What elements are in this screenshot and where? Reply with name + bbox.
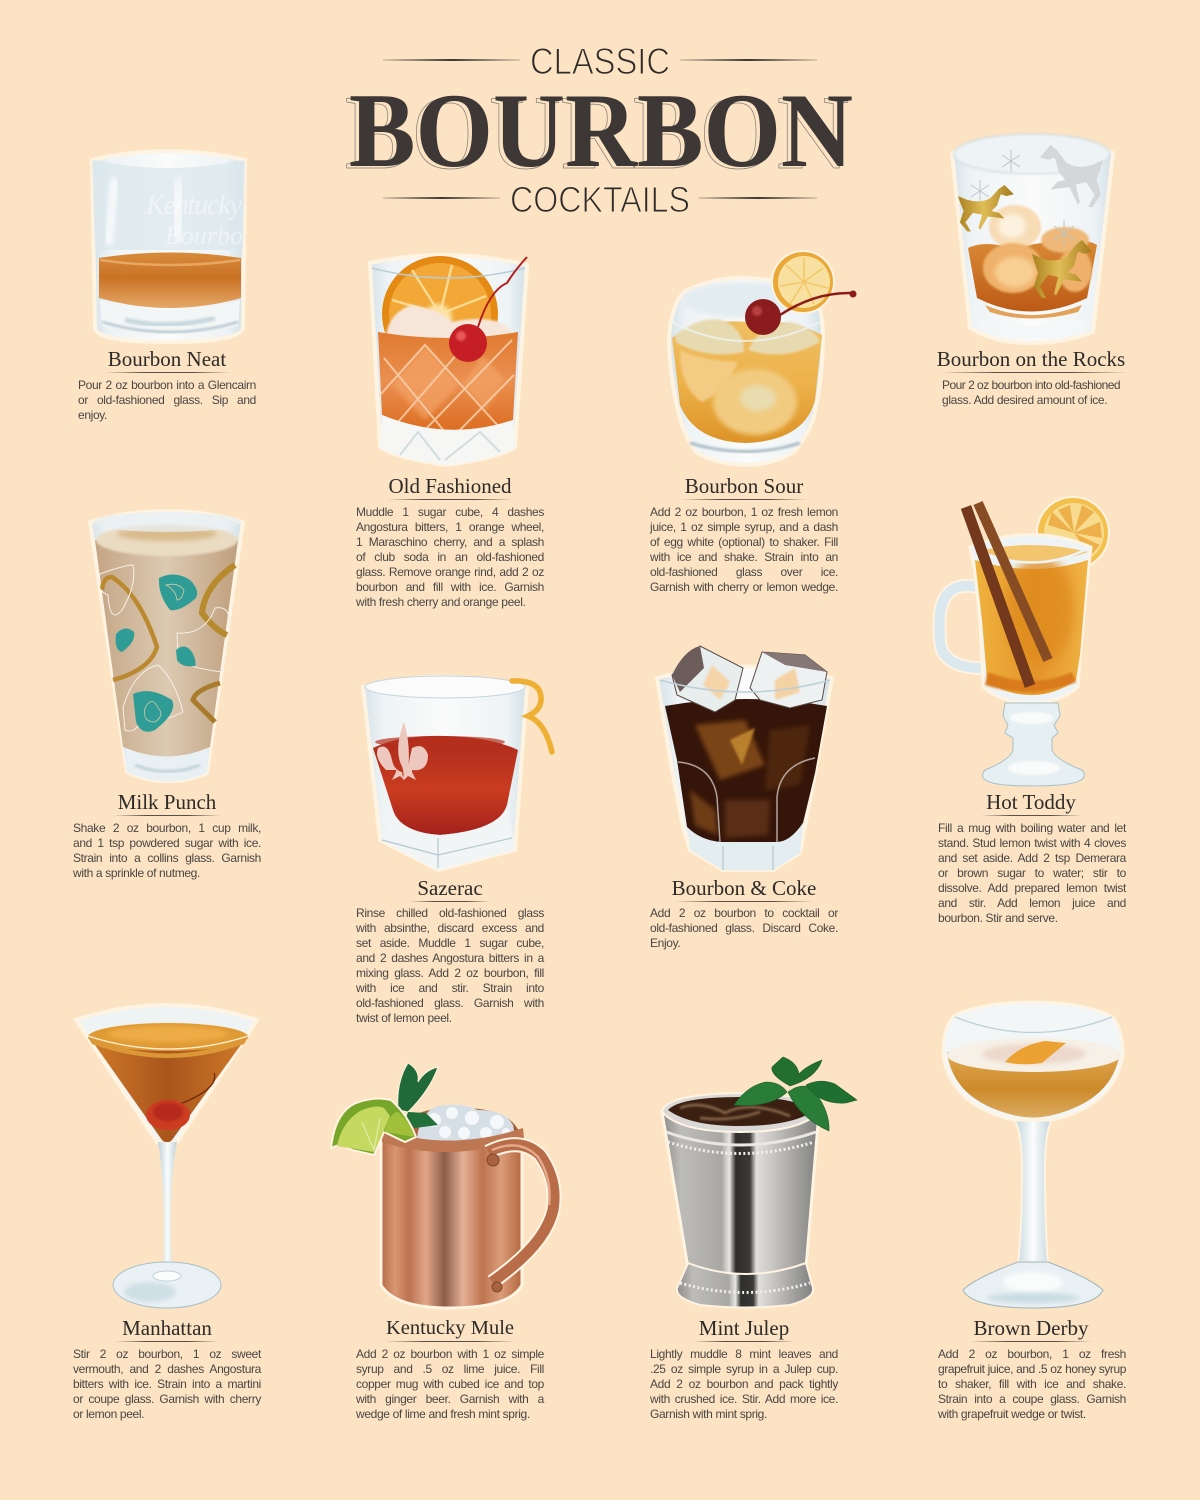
panel: Bourbon Sour bbox=[650, 250, 856, 594]
recipe: Brown Derby bbox=[938, 1346, 1126, 1420]
recipe: Hot Toddy bbox=[938, 820, 1126, 924]
recipe: Bourbon Sour: with ice and shake. Strain into an bbox=[650, 550, 838, 564]
recipe: Manhattan: or coupe glass. Garnish with cherry bbox=[73, 1392, 261, 1406]
recipe: Hot Toddy: Fill a mug with boiling water and let bbox=[938, 820, 1126, 834]
heading: Bourbon & Coke: Bourbon & Coke bbox=[672, 876, 816, 900]
recipe: Hot Toddy: and set aside. Add 2 tsp Demerara bbox=[938, 850, 1126, 864]
panel: Bourbon Neat bbox=[78, 149, 256, 422]
recipe: Bourbon Sour: juice, 1 oz simple syrup, and a dash bbox=[650, 520, 838, 534]
illustration: Bourbon Sour glass bbox=[667, 250, 856, 467]
recipe: Bourbon & Coke: Enjoy. bbox=[650, 936, 680, 950]
recipe: Bourbon & Coke: Add 2 oz bourbon to cocktail or bbox=[650, 906, 838, 920]
recipe: Bourbon Sour: Add 2 oz bourbon, 1 oz fresh lemon bbox=[650, 504, 838, 518]
recipe: Hot Toddy: dissolve. Add prepared lemon twist bbox=[938, 880, 1126, 894]
recipe: Sazerac: old-fashioned glass. Garnish with bbox=[356, 996, 544, 1010]
icon: cinnamon sticks bbox=[966, 503, 1048, 686]
recipe: Bourbon on the Rocks bbox=[942, 378, 1120, 406]
icon: crushed ice bbox=[417, 1105, 515, 1143]
recipe: Brown Derby: Add 2 oz bourbon, 1 oz fresh bbox=[938, 1346, 1126, 1360]
illustration: Bourbon Neat glass: Kentucky bbox=[145, 190, 243, 221]
illustration: Old Fashioned glass bbox=[368, 253, 529, 467]
recipe: Bourbon Neat: enjoy. bbox=[78, 408, 107, 422]
recipe: Bourbon & Coke: old-fashioned glass. Discard Coke. bbox=[650, 920, 838, 934]
illustration: Bourbon Neat glass: Bourbo bbox=[165, 221, 243, 250]
recipe: Bourbon Sour: of egg white (optional) to shaker. Fill bbox=[650, 534, 838, 548]
icon: lime wedge bbox=[331, 1099, 416, 1155]
recipe: Sazerac: and 2 dashes Angostura bitters in a bbox=[356, 950, 544, 964]
panel: Bourbon on the Rocks bbox=[937, 132, 1125, 406]
panel: Manhattan bbox=[73, 1003, 262, 1420]
recipe: Brown Derby: grapefruit juice, and .5 oz honey syrup bbox=[938, 1362, 1126, 1376]
recipe: Milk Punch bbox=[73, 820, 261, 880]
illustration: Mint Julep silver cup bbox=[660, 1056, 858, 1308]
panel: Milk Punch bbox=[73, 509, 261, 880]
recipe: Old Fashioned: with fresh cherry and orange peel. bbox=[356, 594, 526, 608]
recipe: Hot Toddy: and stir. Add lemon juice and bbox=[938, 896, 1126, 910]
icon: mint leaves bbox=[734, 1057, 857, 1131]
recipe: Kentucky Mule: copper mug with cubed ice and top bbox=[356, 1376, 544, 1390]
heading: Milk Punch: Milk Punch bbox=[118, 790, 216, 814]
heading: Brown Derby: Brown Derby bbox=[974, 1316, 1088, 1340]
recipe: Mint Julep: .25 oz simple syrup in a Julep cup. bbox=[650, 1362, 838, 1376]
icon: gold horse right bbox=[1032, 240, 1092, 298]
recipe: Brown Derby: to shaker, fill with ice and shake. bbox=[938, 1376, 1126, 1390]
recipe: Mint Julep: Lightly muddle 8 mint leaves and bbox=[650, 1346, 838, 1360]
icon: lemon twist bbox=[512, 681, 552, 752]
recipe: Hot Toddy: bourbon. Stir and serve. bbox=[938, 910, 1058, 924]
recipe: Manhattan: Stir 2 oz bourbon, 1 oz sweet bbox=[73, 1346, 261, 1360]
recipe: Old Fashioned: Angostura bitters, 1 orange wheel, bbox=[356, 520, 544, 534]
recipe: Manhattan: bitters with ice. Strain into a martini bbox=[73, 1376, 261, 1390]
recipe: Bourbon on the Rocks: glass. Add desired amount of ice. bbox=[942, 392, 1107, 406]
recipe: Old Fashioned: glass. Remove orange rind, add 2 oz bbox=[356, 564, 544, 578]
recipe: Milk Punch: and 1 tsp powdered sugar with ice. bbox=[73, 836, 261, 850]
panel: Old Fashioned bbox=[356, 253, 544, 608]
icon: lemon slice bbox=[1037, 497, 1109, 569]
illustration: Bourbon & Coke glass bbox=[654, 645, 834, 872]
recipe: Kentucky Mule: with ginger beer. Garnish with a bbox=[356, 1392, 544, 1406]
illustration: Bourbon on the Rocks glass bbox=[950, 132, 1115, 345]
recipe: Bourbon Neat bbox=[78, 378, 256, 422]
illustration: Milk Punch glass bbox=[88, 509, 246, 784]
recipe: Manhattan: vermouth, and 2 dashes Angostura bbox=[73, 1362, 261, 1376]
recipe: Kentucky Mule: wedge of lime and fresh mint sprig. bbox=[356, 1406, 530, 1420]
icon: grapefruit twist bbox=[1005, 1041, 1066, 1064]
recipe: Milk Punch: with a sprinkle of nutmeg. bbox=[73, 866, 200, 880]
recipe: Brown Derby: Strain into a coupe glass. Garnish bbox=[938, 1392, 1126, 1406]
title: Classic Bourbon Cocktails bbox=[345, 41, 853, 220]
heading: Classic: CLASSIC bbox=[530, 41, 670, 82]
recipe: Sazerac: with ice and stir. Strain into bbox=[356, 980, 544, 994]
icon: cup base bbox=[677, 1263, 813, 1308]
recipe: Hot Toddy: or brown sugar to water; stir to bbox=[938, 866, 1126, 880]
heading: Sazerac: Sazerac bbox=[417, 876, 483, 900]
recipe: Old Fashioned: bourbon and fill with ice. Garnish bbox=[356, 580, 544, 594]
recipe: Kentucky Mule bbox=[356, 1346, 544, 1420]
icon: mug foot bbox=[982, 703, 1084, 786]
icon: silver horse bbox=[1040, 145, 1103, 207]
panel: Bourbon & Coke bbox=[650, 645, 838, 950]
recipe: Sazerac: set aside. Muddle 1 sugar cube, bbox=[356, 936, 544, 950]
recipe: Mint Julep bbox=[650, 1346, 838, 1420]
illustration: Manhattan glass bbox=[73, 1003, 260, 1308]
recipe: Hot Toddy: stand. Stud lemon twist with 4 cloves bbox=[938, 836, 1126, 850]
icon: fleur-de-lis bbox=[377, 722, 428, 780]
recipe: Old Fashioned: Muddle 1 sugar cube, 4 dashes bbox=[356, 504, 544, 518]
recipe: Bourbon Neat: or old-fashioned glass. Sip and bbox=[78, 393, 256, 407]
illustration: Bourbon Neat glass bbox=[90, 149, 247, 344]
recipe: Sazerac bbox=[356, 906, 544, 1024]
recipe: Milk Punch: Shake 2 oz bourbon, 1 cup milk, bbox=[73, 820, 261, 834]
heading: Manhattan: Manhattan bbox=[122, 1316, 212, 1340]
recipe: Brown Derby: with grapefruit wedge or twist. bbox=[938, 1406, 1086, 1420]
icon: ice cubes bbox=[672, 646, 827, 712]
heading: Old Fashioned: Old Fashioned bbox=[388, 474, 512, 498]
illustration: Brown Derby coupe bbox=[942, 1000, 1124, 1308]
panel: Kentucky Mule bbox=[330, 1062, 562, 1420]
recipe: Mint Julep: with crushed ice. Stir. Add more ice. bbox=[650, 1392, 838, 1406]
recipe: Old Fashioned bbox=[356, 504, 544, 608]
heading: Hot Toddy: Hot Toddy bbox=[986, 790, 1076, 814]
icon: mint sprig bbox=[398, 1063, 438, 1112]
recipe: Sazerac: with absinthe, discard excess and bbox=[356, 920, 544, 934]
recipe: Sazerac: Rinse chilled old-fashioned glass bbox=[356, 906, 544, 920]
icon: teal blobs and gold swooshes bbox=[99, 565, 235, 732]
recipe: Sazerac: twist of lemon peel. bbox=[356, 1010, 452, 1024]
illustration: Hot Toddy mug bbox=[932, 496, 1110, 786]
recipe: Kentucky Mule: Add 2 oz bourbon with 1 oz simple bbox=[356, 1346, 544, 1360]
recipe: Sazerac: mixing glass. Add 2 oz bourbon, fill bbox=[356, 966, 544, 980]
recipe: Bourbon Sour: Garnish with cherry or lemon wedge. bbox=[650, 580, 838, 594]
panel: Hot Toddy bbox=[932, 496, 1126, 924]
recipe: Milk Punch: Strain into a collins glass. Garnish bbox=[73, 850, 261, 864]
icon: mug handle bbox=[488, 1145, 554, 1282]
panel: Sazerac bbox=[356, 674, 555, 1024]
heading: Bourbon Sour: Bourbon Sour bbox=[685, 474, 803, 498]
recipe: Bourbon Sour: old-fashioned glass over ice. bbox=[650, 564, 838, 578]
recipe: Mint Julep: Garnish with mint sprig. bbox=[650, 1406, 767, 1420]
icon: gold horse left bbox=[958, 185, 1014, 232]
heading: Kentucky Mule: Kentucky Mule bbox=[386, 1317, 514, 1339]
recipe: Bourbon on the Rocks: Pour 2 oz bourbon into old-fashioned bbox=[942, 378, 1120, 392]
recipe: Old Fashioned: 1 Maraschino cherry, and a splash bbox=[356, 534, 544, 548]
recipe: Bourbon & Coke bbox=[650, 906, 838, 950]
recipe: Old Fashioned: of club soda in an old-fashioned bbox=[356, 550, 544, 564]
illustration: Sazerac glass bbox=[361, 674, 555, 872]
recipe: Bourbon Neat: Pour 2 oz bourbon into a Glencairn bbox=[78, 378, 256, 392]
recipe: Mint Julep: Add 2 oz bourbon and pack tightly bbox=[650, 1376, 838, 1390]
recipe: Manhattan: or lemon peel. bbox=[73, 1406, 144, 1420]
recipe: Manhattan bbox=[73, 1346, 262, 1420]
heading: Bourbon on the Rocks: Bourbon on the Rocks bbox=[937, 347, 1125, 371]
heading: Mint Julep: Mint Julep bbox=[699, 1316, 789, 1340]
recipe: Kentucky Mule: syrup and .5 oz lime juice. Fill bbox=[356, 1362, 544, 1376]
panel: Brown Derby bbox=[938, 1000, 1126, 1420]
heading: Cocktails: COCKTAILS bbox=[510, 179, 690, 220]
recipe: Bourbon Sour bbox=[650, 504, 838, 594]
illustration: Kentucky Mule copper mug bbox=[330, 1062, 562, 1310]
heading: Bourbon Neat: Bourbon Neat bbox=[108, 347, 226, 371]
panel: Mint Julep bbox=[650, 1056, 858, 1420]
